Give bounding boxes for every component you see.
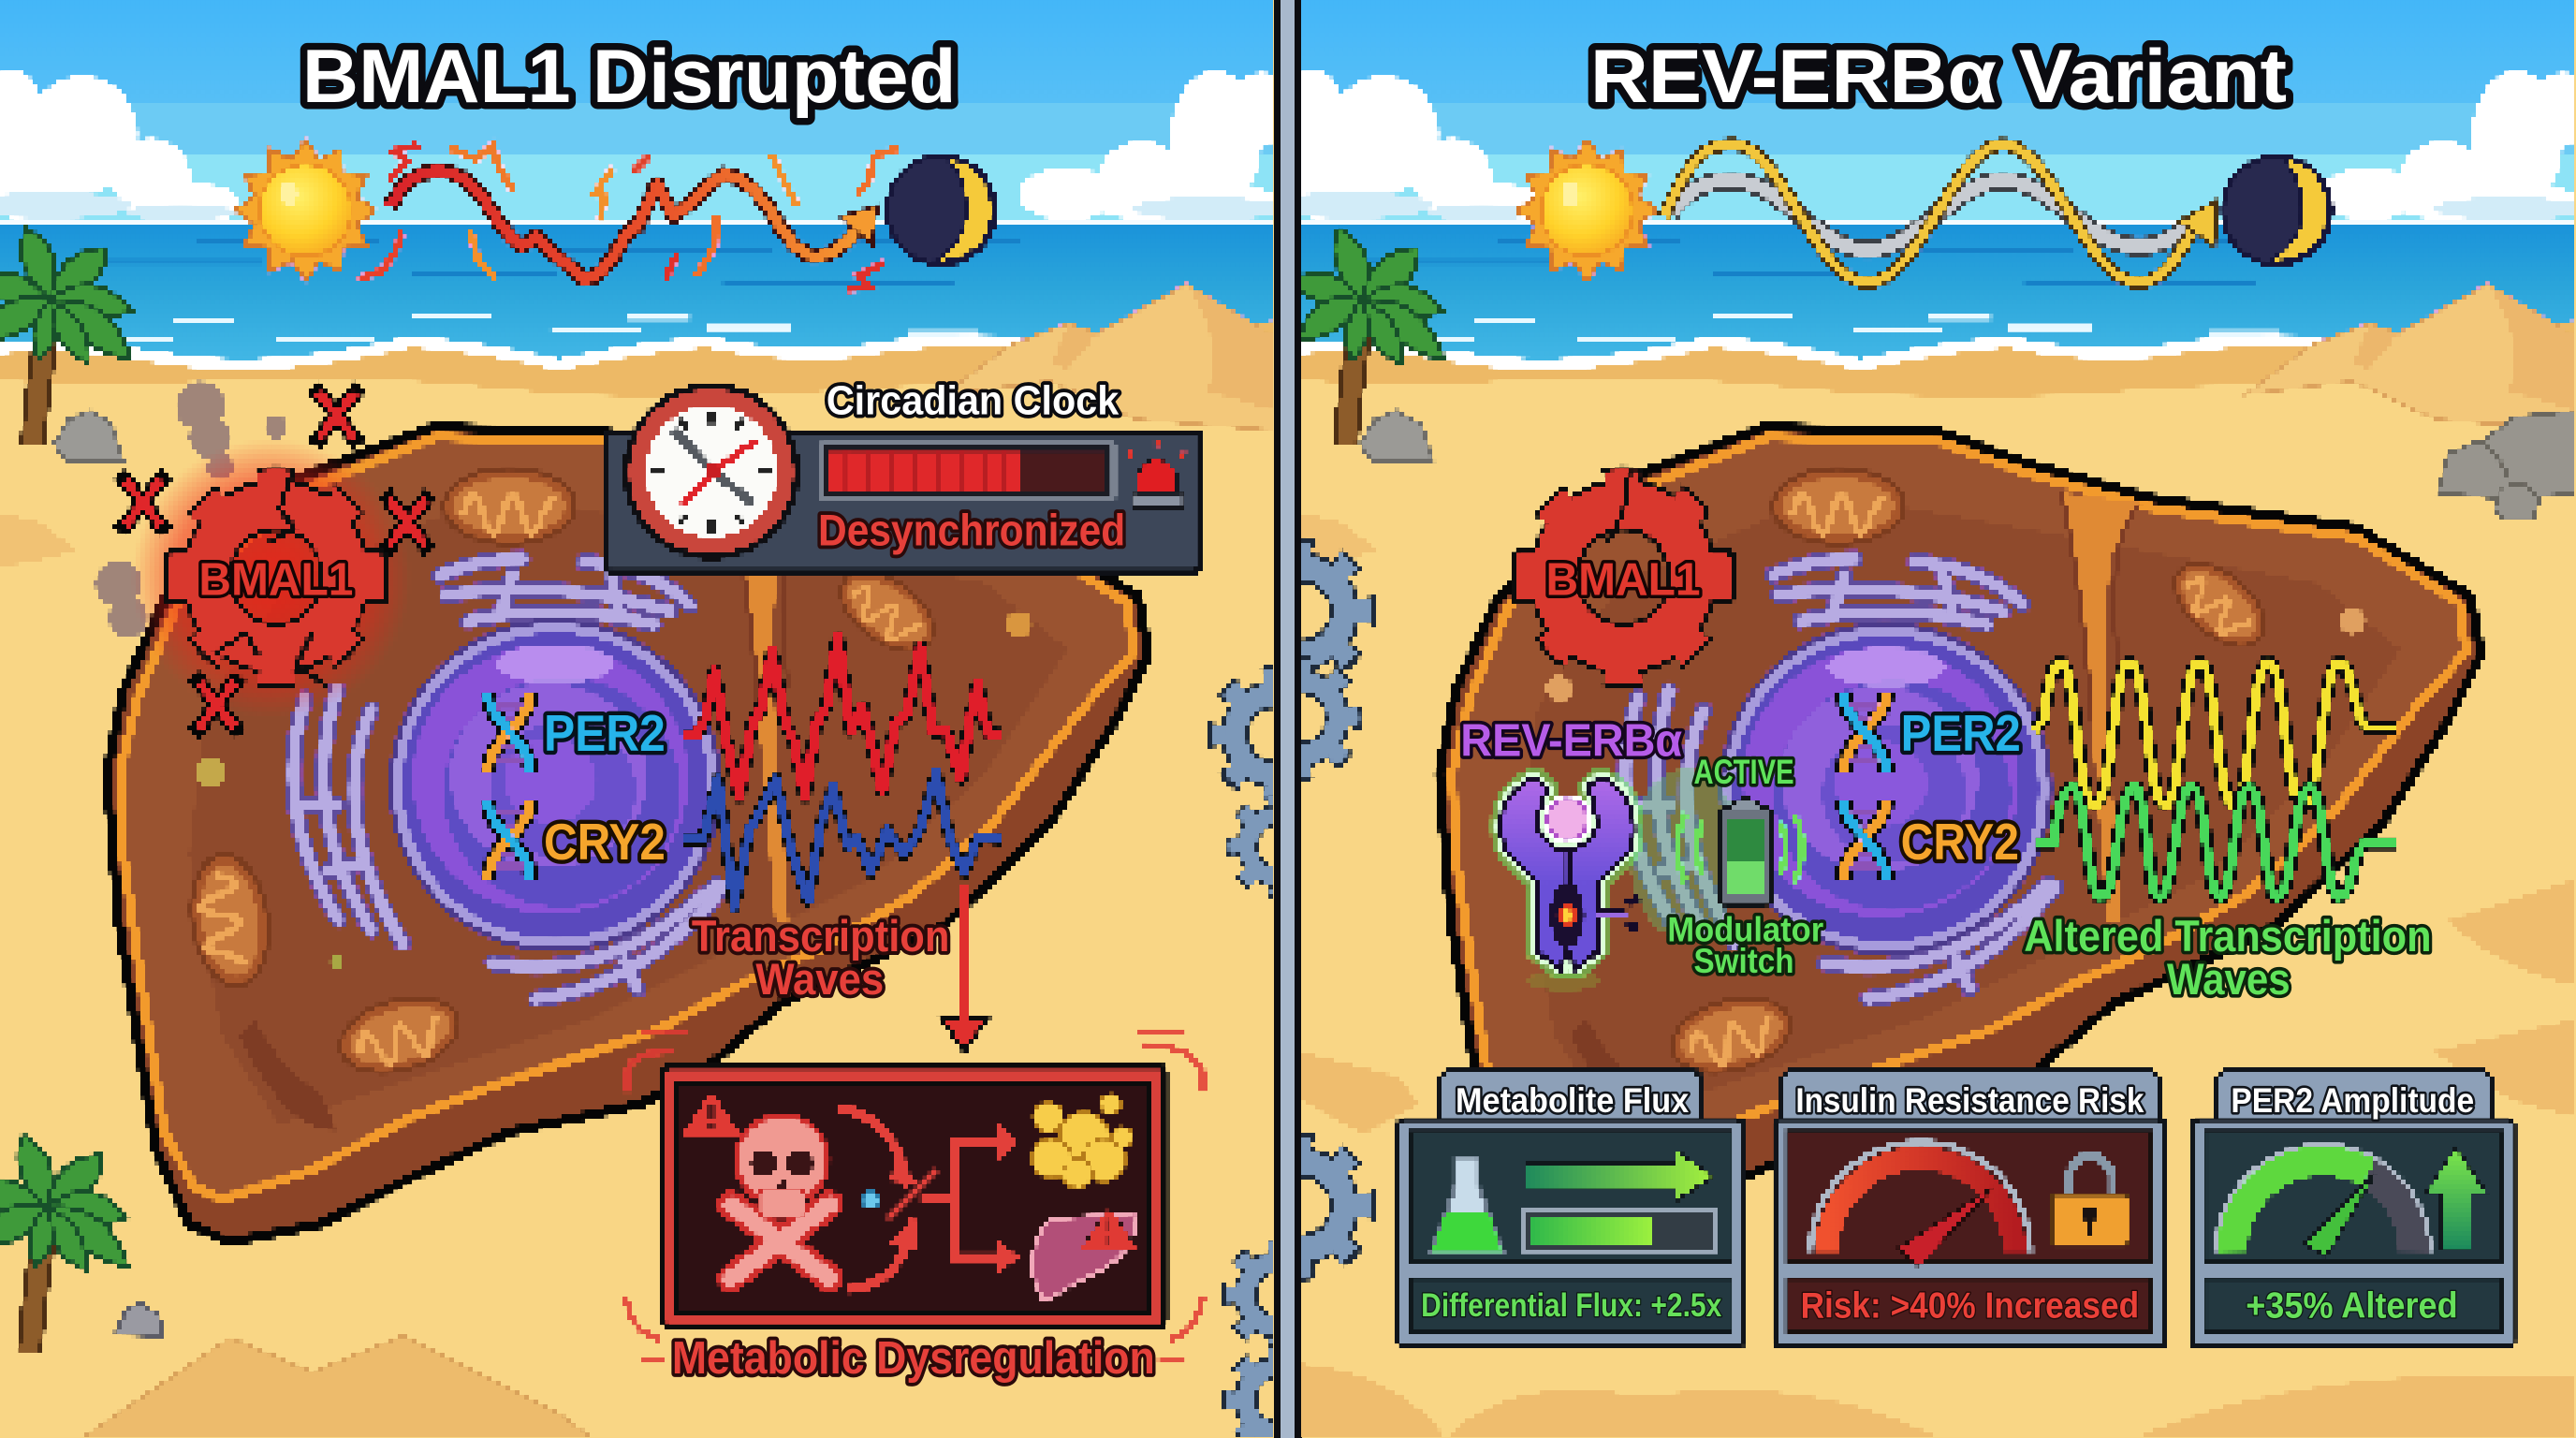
- mitochondrion, right lobe: [2159, 548, 2279, 662]
- active modulator switch: [1677, 799, 1802, 903]
- mitochondrion, bottom: [331, 986, 466, 1084]
- metabolic dysregulation box: [662, 1066, 1164, 1326]
- pathway arrows: [838, 1108, 1018, 1290]
- CRY2 DNA icon: [488, 800, 531, 879]
- CRY2 altered wave: [2034, 787, 2395, 897]
- metric card: insulin resistance risk: [1775, 1071, 2165, 1347]
- endoplasmic reticulum: [1626, 559, 2056, 999]
- metric title: risk: Insulin Resistance Risk: [1795, 1081, 2144, 1120]
- divider: [1274, 0, 1302, 1438]
- CRY2 label: CRY2: [544, 814, 666, 871]
- gear label: BMAL1: [1546, 554, 1701, 605]
- title: BMAL1 Disrupted: [302, 35, 956, 119]
- rock: [54, 411, 124, 462]
- CRY2 label: CRY2: [1901, 814, 2019, 871]
- sun: [1516, 139, 1658, 281]
- small rock: [115, 1303, 163, 1336]
- cell nucleus: [391, 621, 720, 949]
- PER2 DNA icon: [488, 694, 531, 772]
- desynchronized clock: [622, 383, 800, 560]
- endoplasmic reticulum: [293, 559, 723, 999]
- cracked BMAL1 gear: [165, 470, 388, 687]
- illustrated scene: REV-ERBα variant: [1248, 0, 2576, 1438]
- PER2 label: PER2: [1901, 705, 2021, 762]
- fat droplets: [1032, 1094, 1132, 1188]
- metric title: amplitude: PER2 Amplitude: [2231, 1081, 2474, 1120]
- shifted gold rhythm wave: [1664, 144, 2217, 283]
- mitochondrion, bottom: [1664, 986, 1799, 1084]
- normal grey rhythm wave: [1669, 181, 2195, 250]
- active label: ACTIVE: [1694, 753, 1794, 791]
- green signal haze: [1630, 769, 1741, 940]
- moon: [2223, 156, 2331, 265]
- moon: [887, 156, 996, 265]
- sun: [235, 139, 376, 281]
- panel: BMAL1 Disrupted: [0, 0, 1324, 1438]
- mitochondrion, right lobe: [827, 556, 947, 667]
- warning brackets: [626, 1032, 1203, 1358]
- red glow behind gear: [131, 439, 411, 718]
- flux bar: [1525, 1211, 1717, 1251]
- up arrow: [2425, 1147, 2487, 1249]
- mitochondrion, left: [183, 850, 276, 990]
- metric title: flux: Metabolite Flux: [1456, 1081, 1690, 1120]
- metabolic caption: Metabolic Dysregulation: [672, 1333, 1155, 1384]
- risk gauge: [1810, 1142, 2030, 1267]
- cell droplets: [196, 611, 1032, 970]
- panel: REV-ERBα Variant: [1248, 0, 2576, 1438]
- smoke: [95, 381, 287, 638]
- text labels: REV-ERBα panel: [1421, 35, 2474, 1327]
- PER2 altered wave: [2034, 662, 2395, 805]
- liver cell: [107, 427, 1149, 1242]
- title: REV-ERBα Variant: [1590, 35, 2287, 119]
- flux arrow: [1526, 1151, 1714, 1201]
- PER2 erratic wave: [681, 636, 1003, 797]
- CRY2 erratic wave: [681, 772, 1003, 907]
- palm tree: [1290, 228, 1444, 446]
- metric value: flux: Differential Flux: +2.5x: [1421, 1287, 1722, 1324]
- rock cluster: [2438, 411, 2576, 520]
- rock: [1360, 411, 1432, 462]
- BMAL1 gear: [1512, 470, 1734, 666]
- cell nucleus: [1721, 624, 2050, 953]
- wave caption line 1: Altered Transcription: [2024, 912, 2432, 961]
- metric card: PER2 amplitude: [2191, 1071, 2513, 1347]
- skull and crossbones: [731, 1116, 829, 1278]
- modulator caption line 2: Switch: [1694, 942, 1794, 980]
- liver cell: [1439, 427, 2481, 1242]
- damaged liver: [1032, 1206, 1137, 1301]
- amplitude gauge: [2217, 1145, 2430, 1257]
- mitochondrion, top: [1773, 468, 1904, 544]
- arrow to metabolic dysregulation: [942, 884, 988, 1051]
- PER2 label: PER2: [544, 705, 666, 762]
- metric card: metabolite flux: [1398, 1071, 1743, 1347]
- metric value: risk: Risk: >40% Increased: [1801, 1286, 2139, 1327]
- warning triangle: [681, 1091, 741, 1136]
- CRY2 DNA icon: [1843, 800, 1886, 879]
- clock status: Desynchronized: [818, 506, 1125, 556]
- cell droplets: [1546, 608, 2365, 701]
- PER2 DNA icon: [1843, 694, 1886, 772]
- wave caption line 1: Transcription: [692, 912, 949, 961]
- wave caption line 2: Waves: [2167, 955, 2291, 1005]
- circadian clock status panel: [607, 433, 1199, 572]
- illustrated scene: BMAL1 disrupted: [0, 0, 1324, 1438]
- REV-ERBα receptor icon: [1501, 777, 1640, 990]
- broken link marks: [124, 392, 426, 728]
- disrupted day-night rhythm wave: [389, 170, 877, 279]
- wave caption line 2: Waves: [755, 955, 884, 1005]
- decorative gears at divider: [1248, 558, 1354, 1259]
- text labels: BMAL1 panel: [198, 35, 1155, 1384]
- rhythm sparks: [359, 144, 899, 289]
- gear label: BMAL1: [198, 554, 353, 605]
- metric value: amplitude: +35% Altered: [2246, 1286, 2458, 1327]
- REV-ERBα label: REV-ERBα: [1460, 715, 1682, 766]
- palm tree, upper: [0, 228, 131, 446]
- modulator caption line 1: Modulator: [1667, 911, 1823, 949]
- decorative gears at divider: [1226, 685, 1324, 1438]
- sand shading: [1301, 879, 2576, 1438]
- flask: [1431, 1157, 1503, 1254]
- sand dunes, lower left: [82, 1336, 592, 1438]
- sky, sea and sand backdrop: [1268, 0, 2576, 1438]
- sky, sea and sand backdrop: [0, 0, 1292, 1438]
- padlock: [2052, 1155, 2130, 1245]
- palm tree, lower: [0, 1136, 128, 1352]
- mitochondrion, top: [444, 468, 575, 544]
- clock heading: Circadian Clock: [827, 377, 1120, 423]
